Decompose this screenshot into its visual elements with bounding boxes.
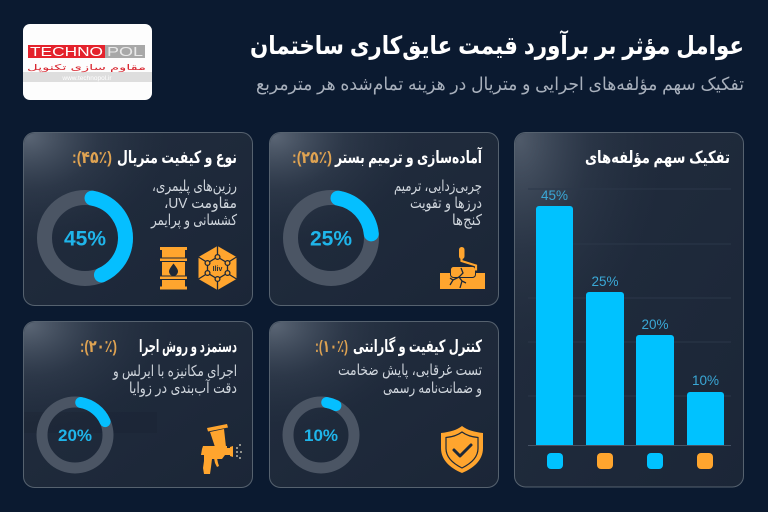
- panel: quality control and warranty: [270, 322, 498, 488]
- icon: spray gun: [201, 424, 242, 474]
- panel: surface preparation: [270, 132, 498, 306]
- heading: quality: کنترل کیفیت و گارانتی: [353, 336, 482, 357]
- text block: material: کشسانی و پرایمر: [150, 212, 238, 230]
- text block: material: مقاومت UV،: [164, 195, 237, 212]
- logo: مقاوم سازی تکنوپل: [27, 63, 146, 72]
- panel: bar chart card: [514, 132, 744, 487]
- heading share: material: (۴۵٪):: [72, 148, 112, 167]
- panel: material type and quality: [24, 132, 252, 306]
- icon: shield with check: [441, 426, 483, 473]
- icon: barrel: [160, 247, 187, 290]
- text block: labor: اجرای مکانیزه با ایرلس و: [112, 363, 237, 380]
- bar: 20%: 20%: [641, 317, 669, 332]
- donut: 45%: 45%: [64, 228, 106, 250]
- icon: polymer hexagon: [198, 246, 236, 290]
- heading: chart: تفکیک سهم مؤلفه‌های: [585, 148, 730, 168]
- donut: 10%: 10%: [304, 426, 338, 445]
- heading: preparation: آماده‌سازی و ترمیم بستر: [334, 146, 483, 168]
- text block: material: [150, 178, 238, 230]
- text block: labor: [112, 363, 237, 397]
- subtitle: تفکیک سهم مؤلفه‌های اجرایی و متریال در هزینه تمام‌شده هر مترمربع: [256, 74, 744, 95]
- donut: 25%: [284, 191, 378, 285]
- logo: [23, 24, 152, 100]
- donut: 20%: [37, 397, 113, 473]
- donut: 25%: 25%: [310, 228, 352, 250]
- text block: quality: [338, 362, 482, 397]
- text block: preparation: [394, 178, 483, 229]
- bar: 45%: 45%: [541, 188, 568, 203]
- bar: 10%: [687, 373, 724, 445]
- heading share: preparation: (۲۵٪):: [292, 148, 332, 167]
- heading share: quality: (۱۰٪):: [315, 337, 348, 356]
- bar: 25%: 25%: [591, 274, 619, 289]
- text block: quality: و ضمانت‌نامه رسمی: [383, 380, 482, 397]
- text block: labor: دقت آب‌بندی در زوایا: [129, 379, 237, 397]
- panel: labor and method: [24, 322, 252, 488]
- logo: POL: [107, 44, 143, 59]
- text block: quality: تست غرقابی، پایش ضخامت: [338, 362, 482, 380]
- donut: 20%: 20%: [58, 426, 92, 445]
- donut: 45%: [38, 191, 132, 285]
- text block: preparation: کنج‌ها: [452, 212, 483, 229]
- text block: preparation: درزها و تقویت: [410, 195, 482, 212]
- icon: roller on cracked wall: [440, 247, 485, 289]
- bar: 10%: 10%: [692, 373, 719, 388]
- legend swatches: [547, 453, 713, 469]
- heading share: labor: (۲۰٪):: [80, 337, 117, 356]
- logo: www.technopol.ir: [61, 75, 112, 82]
- text block: preparation: چربی‌زدایی، ترمیم: [394, 178, 482, 195]
- bar: 25%: [586, 274, 624, 445]
- bar: 20%: [636, 317, 674, 445]
- logo: TECHNO: [30, 44, 103, 59]
- heading: material: نوع و کیفیت متریال: [117, 148, 237, 168]
- bar: 45%: [536, 188, 573, 445]
- icon: polymer hexagon: Iliv: [213, 266, 222, 273]
- donut: 10%: [283, 397, 359, 473]
- heading: labor: دستمزد و روش اجرا: [139, 337, 237, 357]
- text block: material: رزین‌های پلیمری،: [152, 178, 237, 196]
